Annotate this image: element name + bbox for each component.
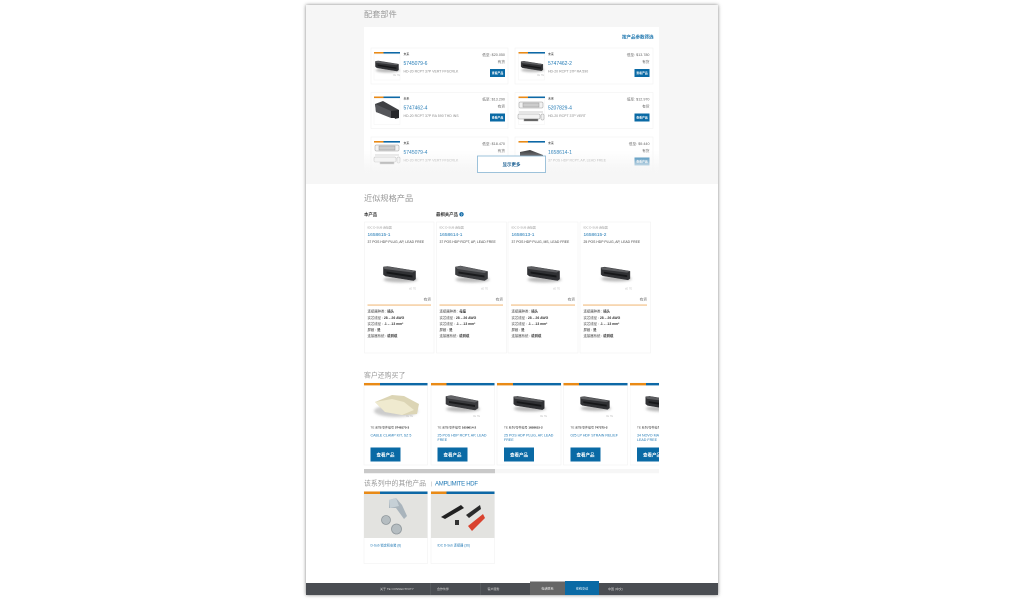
accessory card 5745079-4: 5745079-4	[404, 150, 428, 156]
accessory card 5207829-4: 有货	[642, 103, 650, 108]
fade overlay	[364, 150, 659, 184]
product card 1658613-1: 1658613-1	[512, 232, 535, 238]
product card 1658614-1: 连接器系统 : 缆到缆	[440, 333, 470, 338]
card: 1658615-2	[497, 383, 561, 465]
panel: accessories section	[306, 5, 718, 184]
heading: other products in series: 该系列中的其他产品	[364, 478, 426, 488]
scrollbar	[364, 469, 659, 473]
product card 1658615-2: 连接器种类 : 插头	[584, 308, 611, 314]
card: 747275-2: 查看产品	[576, 451, 595, 458]
footer link: about: 关于 TE CONNECTIVITY	[380, 586, 414, 591]
product card 1658615-1: 连接器种类 : 插头	[368, 308, 395, 314]
accessory card 5745079-4: 有货	[498, 148, 505, 153]
accessory card 5747462-2: 未来	[548, 51, 554, 56]
product card 1658615-1: 连接器系统 : 缆到缆	[368, 333, 398, 338]
accessory card 5207829-4: 低至: $12.970	[627, 96, 650, 102]
accessory card 5745079-6: 有货	[498, 59, 505, 64]
accessory card 5745079-6: 查看产品	[492, 70, 503, 75]
card: 747275-2: ±E TE	[606, 414, 613, 418]
card: IDC D-Sub connectors	[431, 492, 494, 564]
card: 1658615-2: TE 系列/零件编号 1658615-2	[504, 424, 543, 429]
card: 1658614-2: ±E TE	[473, 414, 480, 418]
accessory card 5745079-6: 5745079-6	[404, 61, 428, 67]
accessory card 5747462-4: 未来	[404, 95, 409, 100]
tab: phone contact: 电话联系	[541, 586, 554, 590]
accessory card 1658614-1: 有货	[642, 148, 650, 153]
accessory card 5747462-2	[515, 48, 653, 84]
accessory card 5207829-4: 未来	[548, 95, 554, 100]
product card 1658614-1: ±E TE	[481, 286, 488, 290]
product card 1658613-1: 连接器系统 : 缆到缆	[512, 333, 542, 338]
accessory card 1658614-1: 37 POS HDP RCPT, AP, LEAD FREE	[548, 158, 607, 162]
footer: region: 中国 (中文)	[608, 586, 623, 591]
link: filter by product parameters: 按产品参数筛选	[622, 34, 654, 40]
card: 1658614-2: 25 POS HDP RCPT, AP, LEAD	[438, 434, 487, 438]
accessory card 5747462-4: 查看产品	[492, 114, 503, 120]
footer link: customer service: 客户服务	[488, 586, 500, 591]
product card 1658613-1: 连接器种类 : 插头	[512, 308, 539, 314]
product card 1658614-1: 实芯线径 : 28 – 26 AWG	[440, 315, 477, 320]
card: 1658615-2: 25 POS HDP PLUG, AP, LEAD	[504, 434, 554, 438]
label: this product: 本产品	[364, 211, 378, 218]
accessory card 1658614-1	[515, 137, 653, 173]
product card 1658613-1: IDC D-SUB 连接器	[512, 224, 536, 230]
product card 1658613-1: 有货	[568, 296, 575, 302]
product card 1658615-1: 实芯线径 : .1 – .13 mm²	[368, 321, 404, 326]
card: 1658614-2	[431, 383, 494, 465]
product card 1658615-2: IDC D-SUB 连接器	[584, 224, 608, 230]
accessory card 5745079-6: ±E TE	[393, 73, 400, 77]
accessory card 5745079-6	[371, 48, 508, 84]
accessory card 5747462-4: 低至: $13.290	[482, 96, 505, 102]
card: D-Sub locking hardware: D-Sub 锁定和安装 (8)	[370, 542, 401, 548]
product card 1658614-1: 屏蔽 : 是	[440, 327, 453, 332]
product card 1658615-2: ±E TE	[625, 286, 632, 290]
accessory card 1658614-1: 1658614-1	[548, 150, 572, 156]
product card 1658615-2	[580, 222, 650, 353]
product card 1658615-2: 实芯线径 : .1 – .13 mm²	[584, 321, 620, 326]
product card 1658615-1	[364, 222, 434, 353]
heading: similar products: 近似规格产品	[364, 193, 413, 203]
card: 1658614-2: FREE	[438, 438, 448, 442]
product card 1658614-1: 1658614-1	[440, 232, 463, 238]
accessory card 5745079-6: HD-20 RCPT 37P VERT FFSCRLK	[404, 70, 459, 74]
card: clipped fifth product: LEAD FREE	[637, 438, 658, 442]
button: show more	[478, 156, 546, 172]
card: cable clamp kit: 查看产品	[376, 451, 395, 458]
product card 1658614-1: 37 POS HDP RCPT, AP, LEAD FREE	[440, 240, 496, 244]
heading: other products in series	[364, 478, 478, 488]
heading: accessories: 配套部件	[364, 9, 397, 19]
accessory card 5747462-4: 有货	[498, 103, 505, 108]
accessory card 1658614-1: 低至: $9.440	[629, 141, 650, 146]
tab: phone contact	[530, 582, 565, 595]
product card 1658613-1: 屏蔽 : 是	[512, 327, 525, 332]
accessory card 5745079-4: HD-20 RCPT 37P VERT FFSCRLK	[404, 158, 459, 162]
accessory card 5207829-4: HD-20 RCPT 37P VERT	[548, 114, 587, 118]
card: 1658615-2: 查看产品	[510, 451, 528, 458]
button: show more: 显示更多	[502, 161, 521, 168]
product card 1658614-1: 实芯线径 : .1 – .13 mm²	[440, 321, 476, 326]
accessory card 5747462-4: 5747462-4	[404, 105, 428, 111]
product card 1658613-1: 37 POS HDP PLUG, MS, LEAD FREE	[512, 240, 570, 244]
product card 1658613-1: ±E TE	[553, 286, 560, 290]
product card 1658615-1: 实芯线径 : 28 – 26 AWG	[368, 315, 405, 320]
card: 1658614-2: TE 系列/零件编号 1658614-2	[438, 424, 477, 429]
card: 1658615-2: ±E TE	[540, 414, 547, 418]
card: cable clamp kit: CABLE CLAMP KIT, SZ 5	[370, 434, 411, 438]
tab: online chat	[565, 581, 599, 595]
accessory card 5745079-6: 未来	[404, 51, 409, 56]
accessory card 5747462-4	[371, 92, 508, 128]
accessory card 5745079-4: 低至: $18.470	[482, 141, 505, 146]
panel: accessories list	[364, 27, 659, 184]
accessory card 5207829-4	[515, 92, 653, 128]
card: 747275-2: 025 LP HDF STRAIN RELIEF	[570, 434, 619, 438]
card: cable clamp kit: ±E TE	[406, 414, 413, 418]
product card 1658614-1: 连接器种类 : 母座	[440, 308, 467, 314]
accessory card 5747462-4: HD-20 RCPT 37P RA 590 THD INS	[404, 114, 459, 118]
product card 1658614-1	[436, 222, 506, 353]
card: 747275-2: TE 系列/零件编号 747275-2	[570, 424, 608, 429]
accessory card 1658614-1: 未来	[548, 140, 554, 145]
product card 1658615-1: 1658615-1	[368, 232, 391, 238]
product card 1658615-2: 屏蔽 : 是	[584, 327, 597, 332]
footer bar	[306, 581, 718, 595]
product card 1658615-2: 实芯线径 : 28 – 26 AWG	[584, 315, 621, 320]
card: clipped fifth product: 查看产品	[643, 451, 661, 458]
product card 1658615-1: ±E TE	[409, 286, 416, 290]
card: 1658615-2: FREE	[504, 438, 514, 442]
accessory card 5745079-4	[371, 137, 508, 173]
accessory card 5207829-4: 5207829-4	[548, 105, 572, 111]
product card 1658615-2: 有货	[640, 296, 647, 302]
accessory card 1658614-1: 查看产品	[636, 158, 648, 164]
card: 1658614-2: 查看产品	[444, 451, 462, 458]
page background panel	[306, 5, 718, 595]
product card 1658615-1: 有货	[424, 296, 431, 302]
accessory card 5207829-4: 查看产品	[636, 114, 648, 120]
accessory card 5745079-6: 低至: $20.050	[482, 52, 505, 57]
product card 1658613-1	[508, 222, 578, 353]
heading: other products in series: AMPLIMITE HDF	[435, 482, 478, 488]
card: cable clamp kit: TE 系列/零件编号 5748175-3	[370, 424, 410, 429]
product card 1658615-1: 37 POS HDP PLUG, AP, LEAD FREE	[368, 240, 425, 244]
accessory card 5747462-2: 有货	[642, 59, 650, 64]
accessory card 5747462-2: 低至: $13.780	[627, 52, 650, 57]
label: most related products with info icon: ?	[460, 213, 463, 217]
card: clipped fifth product: 34 NOVO MATE	[637, 434, 664, 438]
label: most related products with info icon: 最相关产品	[436, 211, 459, 218]
product card 1658615-2: 25 POS HDP PLUG, AP, LEAD FREE	[584, 240, 641, 244]
product card 1658613-1: 实芯线径 : .1 – .13 mm²	[512, 321, 548, 326]
card: clipped fifth product: TE 系列/零件编号	[637, 424, 661, 429]
heading: customers also bought: 客户还购买了	[364, 370, 405, 380]
product card 1658615-2: 连接器系统 : 缆到缆	[584, 333, 614, 338]
product card 1658615-1: 屏蔽 : 是	[368, 327, 381, 332]
card: IDC D-Sub connectors: IDC D-Sub 连接器 (36)	[438, 542, 470, 548]
card: 747275-2	[564, 383, 628, 465]
accessory card 5747462-2: HD-20 RCPT 37P RA 590	[548, 70, 588, 74]
accessory card 5747462-2: ±E TE	[537, 73, 544, 77]
card: clipped fifth product	[630, 383, 659, 465]
product card 1658615-2: 1658615-2	[584, 232, 607, 238]
accessory card 5747462-2: 5747462-2	[548, 61, 572, 67]
heading: other products in series: |	[431, 482, 432, 488]
tab: online chat: 在线交谈	[576, 586, 588, 590]
accessory card 5745079-4: 未来	[404, 140, 409, 145]
accessory card 5747462-2: 查看产品	[636, 70, 648, 75]
product card 1658614-1: 有货	[496, 296, 503, 302]
label: most related products with info icon	[436, 211, 464, 218]
product card 1658615-1: IDC D-SUB 连接器	[368, 224, 392, 230]
product card 1658613-1: 实芯线径 : 28 – 26 AWG	[512, 315, 549, 320]
footer link: partners: 合作伙伴	[437, 586, 449, 591]
card: D-Sub locking hardware	[364, 492, 428, 564]
product card 1658614-1: IDC D-SUB 连接器	[440, 224, 464, 230]
card: cable clamp kit	[364, 383, 428, 465]
